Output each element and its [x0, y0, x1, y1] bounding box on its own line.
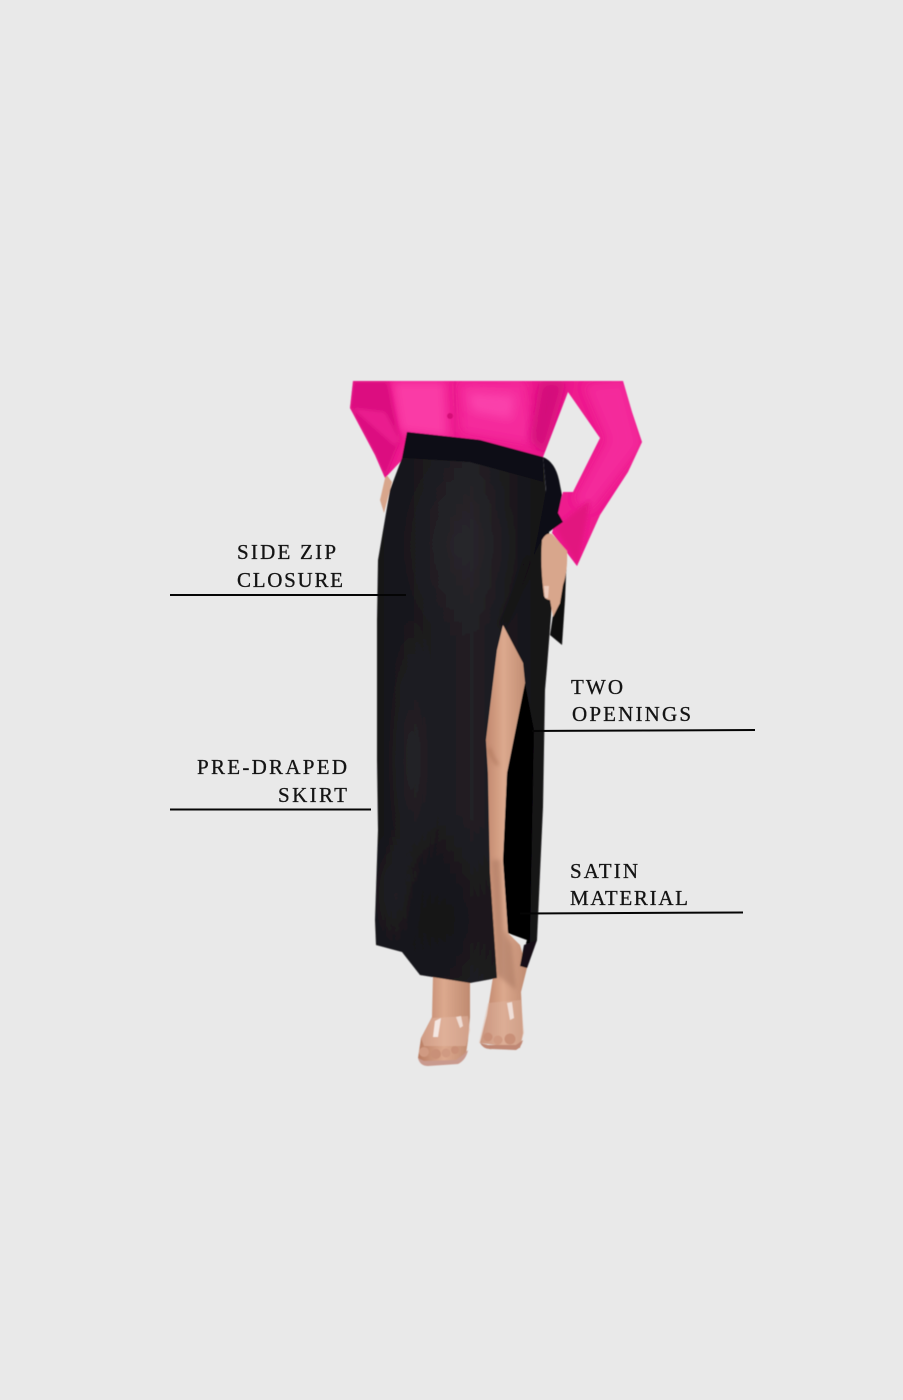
callout: satin material: MATERIAL: [570, 886, 688, 910]
tie tail: [550, 550, 567, 645]
callout: satin material: SATIN: [570, 859, 638, 883]
callout: satin material: [520, 859, 743, 914]
callout: pre-draped skirt: PRE-DRAPED: [197, 755, 347, 779]
callout: side zip closure: SIDE ZIP: [237, 540, 336, 564]
legs and feet: [418, 625, 527, 1066]
right hand: [541, 534, 567, 617]
left hand: [380, 474, 392, 513]
callout: two openings: TWO: [571, 675, 623, 699]
waist tie: [533, 457, 563, 558]
callout: pre-draped skirt: [170, 755, 371, 810]
callout: two openings: OPENINGS: [572, 702, 691, 726]
infographic canvas: [170, 380, 755, 1066]
callout: two openings: [532, 675, 755, 731]
skirt: [374, 431, 552, 984]
skirt hem tie end: [520, 940, 537, 968]
garment illustration: model in skirt: [345, 378, 645, 1066]
callout: side zip closure: CLOSURE: [237, 568, 343, 592]
callout: side zip closure: [170, 540, 406, 595]
callout: pre-draped skirt: SKIRT: [278, 783, 347, 807]
shirt: [345, 378, 645, 570]
